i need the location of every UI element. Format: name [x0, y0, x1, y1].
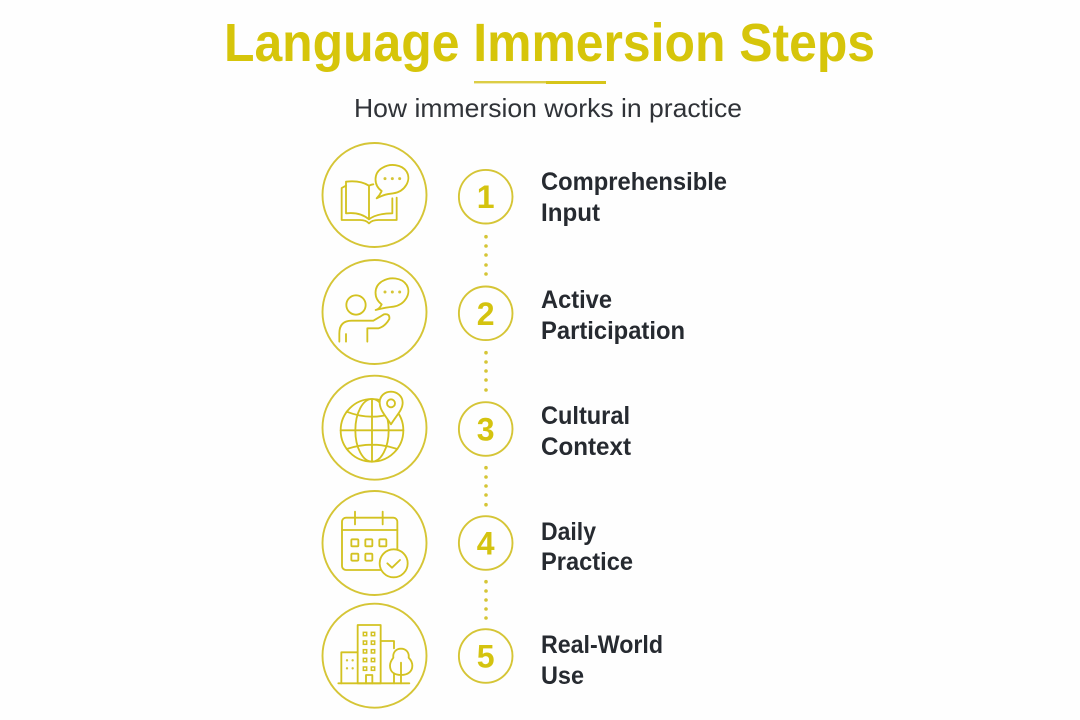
step 4 number: [459, 516, 512, 570]
connector dots 4-5: [484, 580, 488, 620]
step 1 label: [541, 168, 727, 227]
step 1 icon: open book with speech bubble: [322, 143, 426, 247]
step 3 label: Context: [541, 433, 632, 461]
step 1 label: Input: [541, 199, 601, 227]
connector dots 2-3: [484, 351, 488, 392]
step 5 label: Real-World: [541, 631, 663, 659]
step 4 icon: calendar with check badge: [322, 491, 426, 595]
step 4 label: Practice: [541, 548, 633, 576]
step 4 number: 4: [477, 526, 495, 562]
step 5 label: [541, 631, 663, 690]
step 4 label: [541, 518, 633, 576]
step 3 icon: globe with map pin: [322, 376, 426, 480]
step 4 label: Daily: [541, 518, 596, 546]
step 5 number: 5: [477, 638, 495, 674]
step 3 label: [541, 402, 632, 461]
step 2 label: Participation: [541, 317, 685, 345]
step 1 label: Comprehensible: [541, 168, 727, 196]
step 2 icon: person with speech bubble: [322, 260, 426, 364]
step 2 number: 2: [477, 296, 495, 332]
step 3 number: 3: [477, 412, 495, 448]
step 2 number: [459, 286, 512, 340]
step 5 number: [459, 629, 512, 683]
title underline: [474, 81, 606, 84]
step 5 label: Use: [541, 662, 584, 690]
step 5 icon: city buildings and tree: [322, 604, 426, 708]
step 1 number: [459, 170, 512, 224]
connector dots 3-4: [484, 466, 488, 507]
step 2 label: [541, 286, 685, 345]
step 3 label: Cultural: [541, 402, 630, 430]
step 1 number: 1: [477, 179, 495, 215]
title: Language Immersion Steps: [224, 13, 875, 73]
connector dots 1-2: [484, 235, 488, 276]
step 2 label: Active: [541, 286, 612, 314]
subtitle: How immersion works in practice: [354, 93, 742, 123]
step 3 number: [459, 402, 512, 456]
